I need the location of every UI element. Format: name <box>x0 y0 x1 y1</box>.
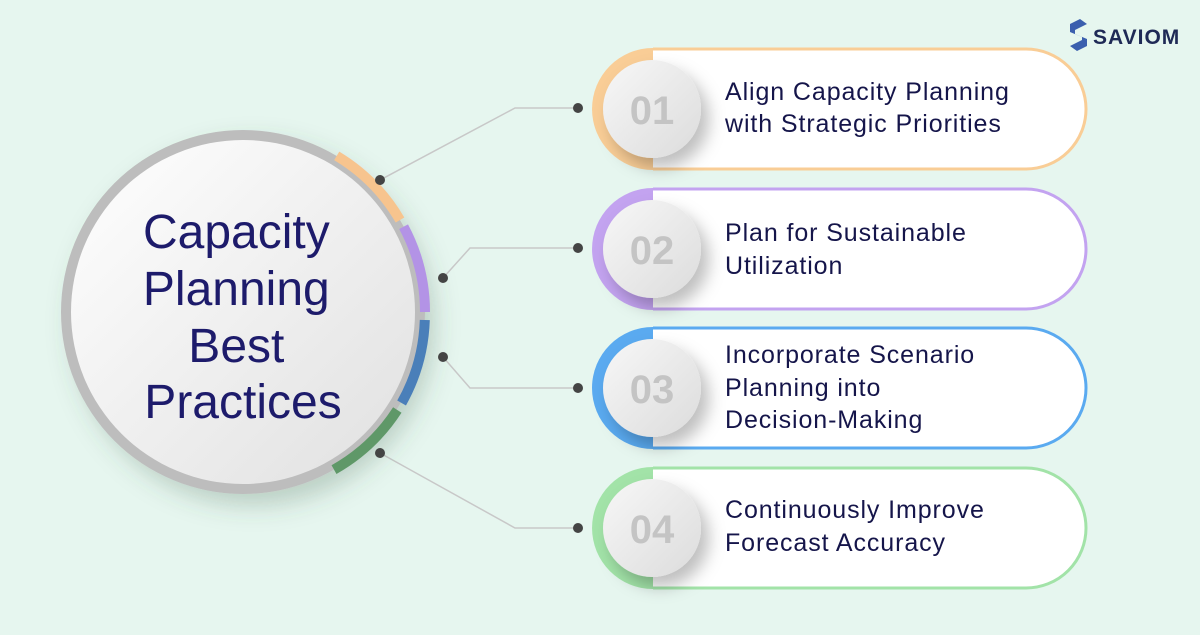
panel: item 03 <box>592 327 1086 449</box>
connector lines <box>380 108 578 528</box>
logo: saviom <box>1070 19 1180 51</box>
dots <box>375 103 583 533</box>
ring segments <box>334 156 425 470</box>
panel: item 01: with Strategic Priorities <box>724 110 1002 138</box>
central circle <box>61 130 425 494</box>
panel: item 01: Align Capacity Planning <box>725 78 1010 106</box>
title: Practices <box>144 376 342 429</box>
panel: item 02: 02 <box>630 229 674 273</box>
panel: item 01 <box>592 48 1086 170</box>
panel: item 04: 04 <box>630 508 675 552</box>
panel: item 02: Utilization <box>725 252 843 280</box>
logo: saviom: SAVIOM <box>1093 26 1180 49</box>
panel: item 02 <box>592 188 1086 310</box>
panel: item 03: 03 <box>630 368 674 412</box>
panel: item 01: 01 <box>630 89 674 133</box>
panel: item 03: Incorporate Scenario <box>725 341 975 369</box>
panel: item 04: Forecast Accuracy <box>725 529 946 557</box>
panel: item 03: Planning into <box>725 374 881 402</box>
title: Planning <box>143 263 330 316</box>
panel: item 04 <box>592 467 1086 589</box>
panel: item 02: Plan for Sustainable <box>725 219 967 247</box>
title: Best <box>188 320 284 373</box>
panel: item 03: Decision-Making <box>725 406 923 434</box>
title: Capacity <box>143 206 330 259</box>
panel: item 04: Continuously Improve <box>725 496 985 524</box>
